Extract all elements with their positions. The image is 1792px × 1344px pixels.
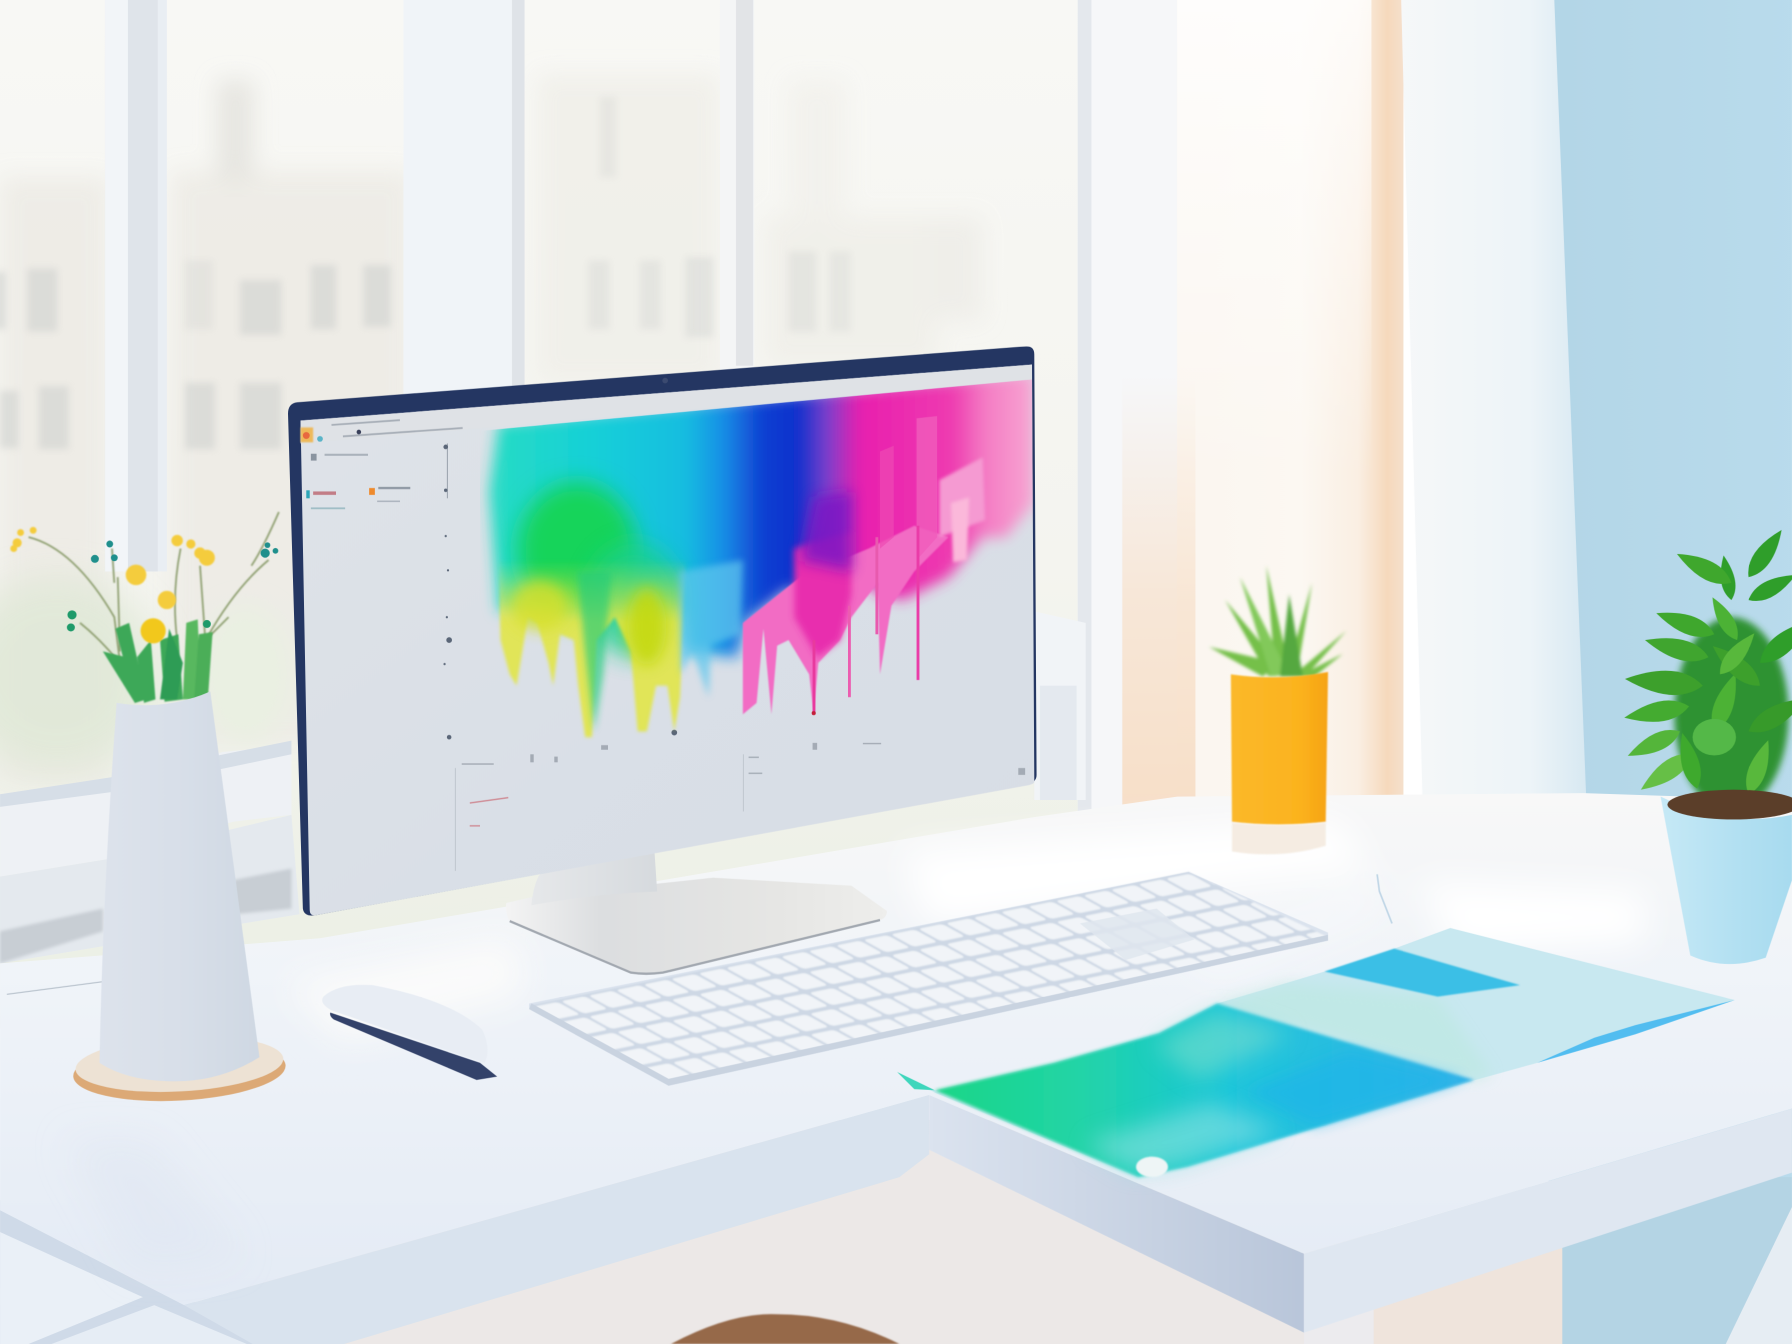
window frame <box>0 0 1183 963</box>
colour wash <box>489 373 1034 657</box>
pot reflection <box>1232 823 1326 854</box>
screen toolbar <box>301 365 1032 443</box>
vase with flowers <box>10 512 287 1106</box>
plant foliage <box>1623 525 1792 811</box>
chair back <box>671 1314 899 1344</box>
flower stems <box>29 512 279 686</box>
plant in orange pot <box>1209 566 1346 854</box>
desk front face <box>184 1095 929 1344</box>
desk lighting <box>69 817 1646 1269</box>
plant in blue pot <box>1623 525 1792 964</box>
room below desk <box>229 1120 1792 1344</box>
yellow drips <box>498 560 686 737</box>
keyboard <box>529 872 1328 1086</box>
teal flowers <box>67 541 278 631</box>
paper with gradient print <box>897 928 1735 1177</box>
curtain: sheer peach <box>1122 0 1403 811</box>
glass crease on desk <box>1377 874 1392 923</box>
blue drips <box>679 560 743 697</box>
rainbow chart <box>489 373 1034 737</box>
monitor <box>288 346 1037 916</box>
monitor stand <box>506 840 887 974</box>
desk top <box>0 793 1792 1305</box>
screen sidebar marks <box>306 443 1025 871</box>
blue pot <box>1661 797 1792 964</box>
wall: pale blue <box>1549 0 1792 1344</box>
desk right slab: front face <box>1304 1109 1792 1333</box>
desk right slab: shaded end face <box>929 1095 1304 1333</box>
soil <box>1667 790 1792 819</box>
green glow <box>518 482 637 619</box>
pink drips <box>743 416 985 715</box>
vase body <box>99 691 259 1081</box>
orange pot <box>1231 672 1328 825</box>
lower left shelf pieces <box>0 1232 247 1344</box>
curtain: sheer white <box>1401 0 1586 814</box>
yellow flowers <box>10 527 215 643</box>
spiky leaves <box>1209 566 1346 677</box>
lower left shelf base <box>0 1200 274 1344</box>
mouse / stylus <box>322 985 497 1080</box>
window background with blurred buildings <box>0 0 1143 1029</box>
leaves <box>103 619 213 703</box>
wooden base <box>72 1031 287 1106</box>
